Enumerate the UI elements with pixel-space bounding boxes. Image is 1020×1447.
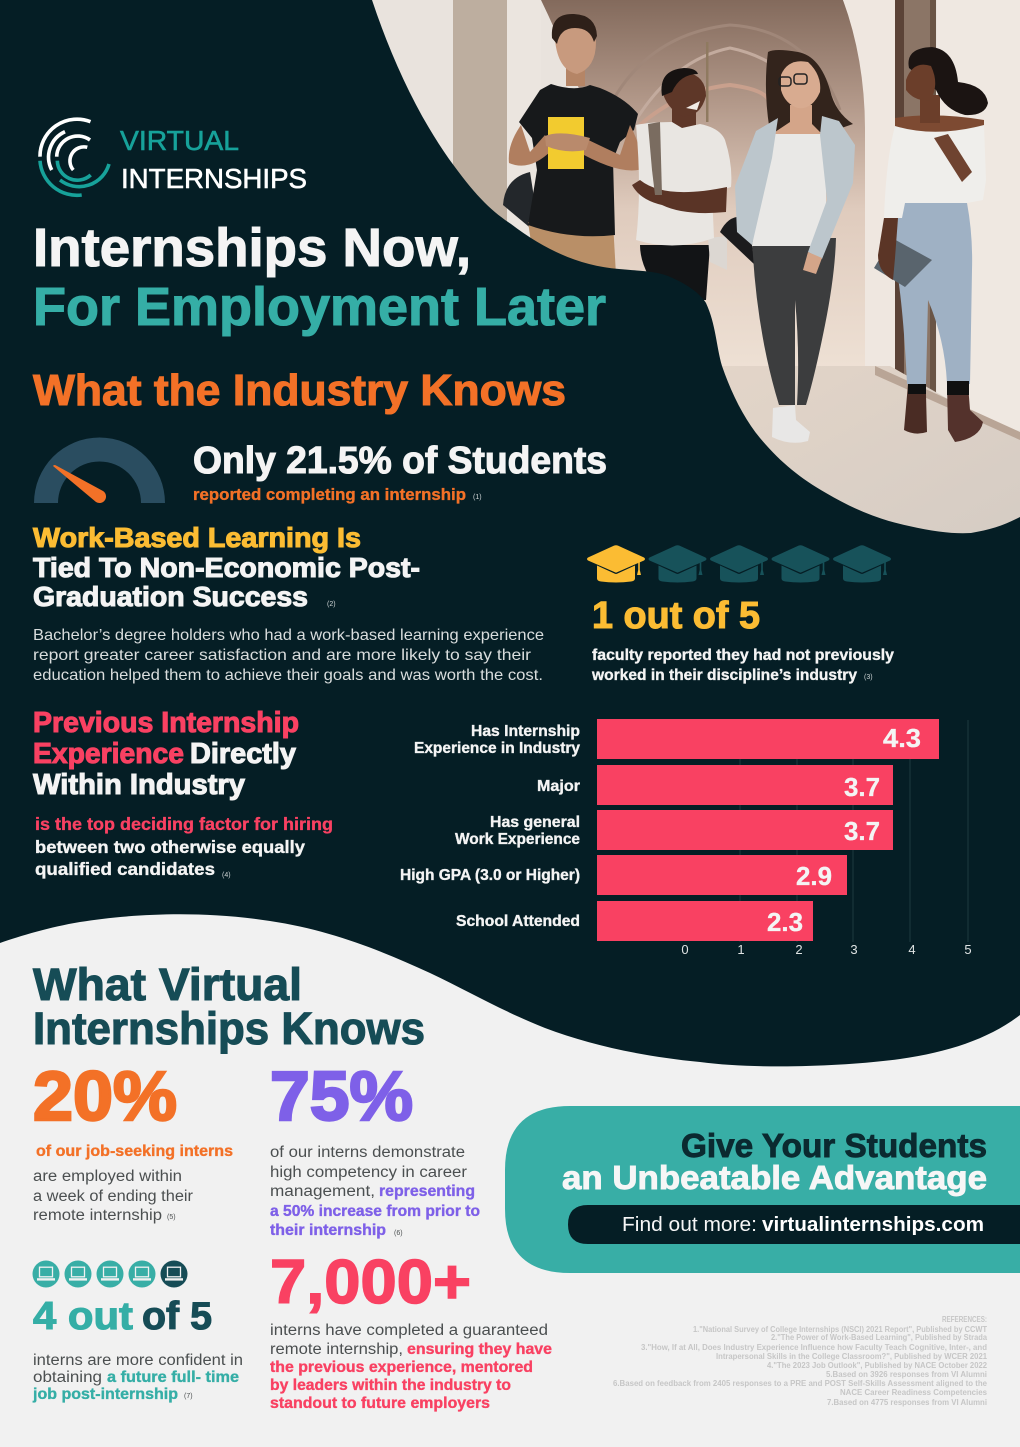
stat: 7,000+ interns: remote internship, (270, 1341, 403, 1358)
stat: 1 out of 5 faculty (591, 595, 894, 684)
section: work-based learning: Bachelor’s degree holders who had a work-based learning experience (33, 627, 544, 644)
section: previous internship experience: Experience (33, 738, 184, 770)
bar chart: hiring deciding factors: 4.3 (883, 723, 921, 753)
stat: 4 out of 5 interns: job post-internship (32, 1386, 178, 1403)
stat: 75% high competency: representing (379, 1183, 475, 1200)
heading: What Virtual Internships Knows: What Virtual (33, 959, 302, 1010)
references: Intrapersonal Skills in the College Classroom?", Published by WCER 2021 (716, 1352, 988, 1361)
logo: Virtual Internships: INTERNSHIPS (121, 163, 307, 194)
stat: 1 out of 5 faculty: worked in their discipline’s industry (591, 667, 857, 684)
stat: 1 out of 5 faculty: faculty reported they had not previously (592, 647, 894, 664)
title: For Employment Later (33, 277, 606, 337)
section: work-based learning: Tied To Non-Economic Post- (33, 552, 420, 583)
bar chart: hiring deciding factors: 5 (964, 942, 972, 957)
bar chart: hiring deciding factors: 1 (737, 942, 745, 957)
bar chart: hiring deciding factors: 3 (850, 942, 858, 957)
stat: 7,000+ interns: interns have completed a guaranteed (270, 1322, 548, 1339)
stat: only 21.5% of students: (1) (473, 494, 482, 501)
bar chart: hiring deciding factors: Work Experience (455, 831, 580, 848)
photo: four students walking down a corridor (360, 0, 1020, 540)
references: NACE Career Readiness Competencies (840, 1388, 988, 1397)
bar chart: hiring deciding factors: Major (537, 778, 580, 795)
stat: 7,000+ interns: by leaders within the industry to (270, 1377, 511, 1394)
logo: Virtual Internships (40, 119, 307, 195)
stat: only 21.5% of students (193, 440, 607, 504)
bar chart: hiring deciding factors: Has general (490, 814, 580, 831)
stat: 75% high competency: a 50% increase from prior to (270, 1203, 480, 1220)
icon row: laptops, 4 of 5 highlighted (32, 1260, 188, 1288)
heading: What Virtual Internships Knows: Internships Knows (33, 1003, 425, 1054)
references: 5.Based on 3926 responses from VI Alumni (826, 1370, 987, 1379)
section: previous internship experience: is the top deciding factor for hiring (35, 814, 333, 834)
stat: 75% high competency: high competency in career (270, 1164, 467, 1181)
stat: 4 out of 5 interns: obtaining (33, 1369, 102, 1386)
stat: 4 out of 5 interns: 4 out (33, 1295, 133, 1338)
heading: What Virtual Internships Knows (33, 959, 425, 1054)
bar chart: hiring deciding factors: 2 (795, 942, 803, 957)
stat: 4 out of 5 interns: interns are more confident in (33, 1352, 243, 1369)
section: previous internship experience: qualified candidates (35, 859, 215, 879)
references: 1."National Survey of College Internships (NSCI) 2021 Report", Published by CCWT (693, 1325, 987, 1334)
bar chart: hiring deciding factors: 3.7 (844, 772, 880, 802)
icon row: graduation caps, 1 of 5 highlighted (587, 545, 891, 582)
section: work-based learning: Graduation Success (33, 581, 308, 612)
logo mark: concentric arcs (40, 119, 109, 195)
stat: 4 out of 5 interns (32, 1295, 243, 1403)
references (613, 1315, 988, 1407)
section: previous internship experience: between two otherwise equally (35, 837, 305, 857)
dark background wave (0, 0, 1020, 1066)
bar chart: hiring deciding factors: 3.7 (844, 816, 880, 846)
bar chart: hiring deciding factors: Has Internship (471, 723, 580, 740)
references: 3."How, If at All, Does Industry Experience Influence how Faculty Teach Cognitive, Inter-, and (641, 1343, 987, 1352)
references: 6.Based on feedback from 2405 responses to a PRE and POST Self-Skills Assessment aligned to the (613, 1379, 988, 1388)
stat: 4 out of 5 interns: of 5 (142, 1295, 212, 1338)
bar chart: hiring deciding factors: School Attended (456, 913, 580, 930)
title: Internships Now, (33, 218, 471, 278)
stat: 20% employed: (5) (167, 1214, 176, 1221)
stat: 20% employed: remote internship (33, 1207, 162, 1224)
callout: give your students an unbeatable advantage: an Unbeatable Advantage (562, 1159, 987, 1196)
stat: 7,000+ interns: standout to future employers (270, 1395, 490, 1412)
section: work-based learning: education helped them to achieve their goals and was worth the cost. (33, 667, 543, 684)
logo: Virtual Internships: VIRTUAL (120, 125, 239, 156)
gauge icon (34, 438, 165, 503)
section: previous internship experience: (4) (222, 872, 231, 879)
stat: 4 out of 5 interns: (7) (184, 1393, 193, 1400)
section: work-based learning: report greater career satisfaction and are more likely to say their (33, 647, 532, 664)
bar chart: hiring deciding factors: Experience in Industry (414, 740, 580, 757)
student 1: man in black t-shirt (503, 14, 642, 275)
section: work-based learning (33, 522, 544, 684)
references: 2."The Power of Work-Based Learning", Published by Strada (771, 1333, 988, 1342)
stat: 75% high competency: (6) (394, 1230, 403, 1237)
stat: 75% high competency: of our interns demonstrate (270, 1144, 465, 1161)
section: previous internship experience: Directly (190, 738, 296, 770)
section: work-based learning: (2) (327, 601, 336, 608)
section: previous internship experience (33, 707, 333, 879)
references: REFERENCES: (942, 1315, 987, 1324)
bar chart: hiring deciding factors: 4 (908, 942, 916, 957)
heading: What the Industry Knows: What the Industry Knows (33, 366, 566, 415)
bar chart: hiring deciding factors: 2.9 (796, 861, 832, 891)
bar chart: hiring deciding factors: 0 (681, 942, 689, 957)
link pill: find out more: Find out more: (622, 1214, 757, 1236)
references: 4."The 2023 Job Outlook", Published by NACE October 2022 (767, 1361, 988, 1370)
callout: give your students an unbeatable advantage: Give Your Students (681, 1127, 987, 1164)
link pill: find out more (568, 1205, 1020, 1244)
stat: only 21.5% of students: Only 21.5% of Students (193, 440, 607, 482)
stat: 20% employed: a week of ending their (33, 1188, 193, 1205)
link pill: find out more: virtualinternships.com (762, 1214, 984, 1236)
section: work-based learning: Work-Based Learning Is (33, 522, 361, 553)
stat: 75% high competency: 75% (270, 1057, 413, 1135)
section: previous internship experience: Previous Internship (33, 707, 299, 739)
bar chart: hiring deciding factors: High GPA (3.0 or Higher) (400, 867, 580, 884)
stat: 4 out of 5 interns: a future full- time (107, 1369, 239, 1386)
stat: 75% high competency (270, 1057, 480, 1239)
stat: 20% employed: of our job-seeking interns (36, 1143, 233, 1160)
stat: 20% employed (33, 1057, 233, 1224)
callout: give your students an unbeatable advantage (505, 1106, 1020, 1273)
stat: 1 out of 5 faculty: 1 out of 5 (592, 595, 760, 637)
bar chart: hiring deciding factors: 2.3 (767, 907, 803, 937)
bar chart: hiring deciding factors (400, 719, 972, 957)
student 4: woman in white top and ripped jeans (874, 47, 988, 442)
stat: 20% employed: are employed within (33, 1168, 182, 1185)
stat: 20% employed: 20% (33, 1057, 177, 1135)
section: previous internship experience: Within Industry (33, 769, 245, 801)
stat: 75% high competency: their internship (270, 1222, 386, 1239)
title (33, 218, 606, 337)
stat: 7,000+ interns: 7,000+ (270, 1248, 471, 1317)
student 3: woman with glasses and grey jacket (720, 50, 855, 443)
stat: 7,000+ interns: the previous experience, mentored (270, 1359, 533, 1376)
student 2: woman in white t-shirt (632, 68, 731, 300)
stat: 1 out of 5 faculty: (3) (864, 674, 873, 681)
stat: 7,000+ interns: ensuring they have (407, 1341, 552, 1358)
stat: only 21.5% of students: reported completing an internship (193, 486, 466, 504)
stat: 7,000+ interns (270, 1248, 552, 1412)
references: 7.Based on 4775 responses from VI Alumni (827, 1398, 987, 1407)
stat: 75% high competency: management, (270, 1183, 375, 1200)
